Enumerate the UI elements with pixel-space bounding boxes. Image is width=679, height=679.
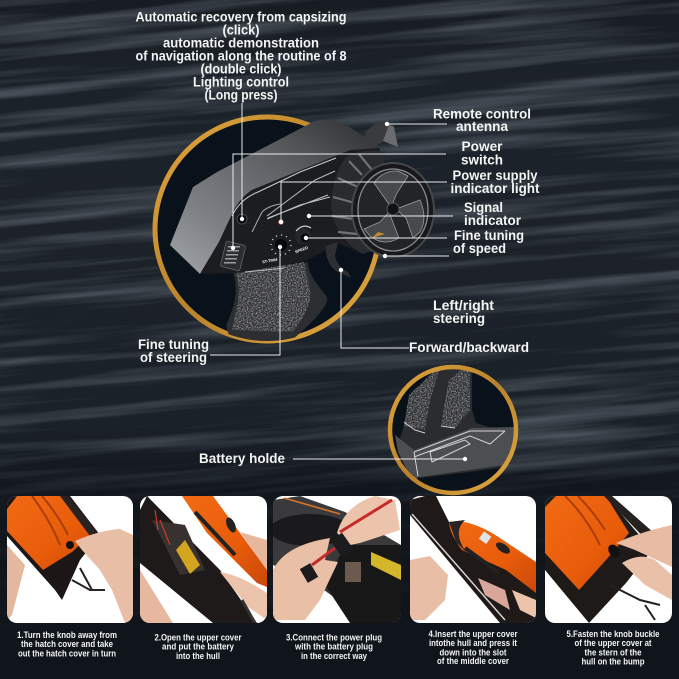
- caption: step 4: down into the slot: [440, 648, 507, 658]
- label: fine tuning of steering: of steering: [140, 350, 207, 365]
- label: fine tuning of speed: of speed: [453, 241, 506, 256]
- label: fine tuning of steering: Fine tuning: [138, 337, 209, 352]
- controller trigger: [326, 242, 351, 278]
- label: power switch: switch: [461, 152, 503, 168]
- controller front panel: SPEED: [294, 245, 309, 254]
- label: signal indicator: [464, 200, 522, 228]
- title block: automatic functions label: Lighting control: [193, 74, 289, 90]
- caption: step 5: the stern of the: [584, 648, 642, 658]
- caption: step 1: out the hatch cover in turn: [18, 648, 116, 660]
- label: remote control antenna: Remote control: [433, 106, 531, 122]
- title block: automatic functions label: (click): [222, 22, 260, 38]
- label: left/right steering: steering: [433, 311, 485, 326]
- title block: automatic functions label: [136, 10, 347, 102]
- label: battery holder: Battery holde: [199, 451, 285, 466]
- label: signal indicator: Signal: [464, 200, 503, 215]
- callout leader lines and dots: [210, 103, 467, 461]
- caption: step 2: into the hull: [176, 651, 220, 662]
- title block: automatic functions label: of navigation along the routine of 8: [136, 48, 347, 64]
- label: power supply indicator light: [450, 168, 540, 196]
- caption: step 2: [154, 632, 242, 662]
- caption: step 3: with the battery plug: [294, 642, 373, 652]
- caption: step 1: [17, 630, 117, 660]
- controller housing: [170, 120, 378, 274]
- controller wheel: [352, 163, 434, 257]
- controller antenna: [365, 122, 398, 147]
- grip close-up: [400, 369, 502, 478]
- caption: step 3: [286, 632, 382, 662]
- label: left/right steering: Left/right: [433, 298, 495, 313]
- label: fine tuning of speed: Fine tuning: [454, 228, 524, 243]
- caption: step 3: 3.Connect the power plug: [286, 632, 382, 644]
- main gold ring with controller: [155, 117, 434, 345]
- caption: step 2: and put the battery: [162, 642, 235, 652]
- label: forward/backward: Forward/backward: [409, 340, 529, 355]
- caption: step 3: in the correct way: [301, 651, 368, 662]
- label: remote control antenna: antenna: [456, 119, 508, 134]
- title block: automatic functions label: (Long press): [204, 88, 278, 102]
- label: power switch: Power: [462, 139, 503, 154]
- panel: step 5 photo: [545, 496, 672, 623]
- caption: step 1: the hatch cover and take: [21, 639, 113, 650]
- caption: step 4: intothe hull and press it: [429, 638, 518, 649]
- controller front panel: [200, 148, 380, 274]
- controller grip: [226, 262, 327, 345]
- caption: step 5: [566, 629, 660, 668]
- caption: step 2: 2.Open the upper cover: [154, 632, 242, 644]
- panel: step 4 photo: [410, 496, 536, 623]
- title block: automatic functions label: automatic demonstration: [163, 36, 319, 50]
- caption: step 5: hull on the bump: [582, 656, 645, 668]
- panel: step 3 photo: [270, 496, 401, 623]
- caption: step 1: 1.Turn the knob away from: [17, 630, 117, 641]
- battery base close-up: [395, 427, 514, 478]
- label: left/right steering: [433, 298, 495, 326]
- label: signal indicator: indicator: [464, 213, 522, 228]
- label: power supply indicator light: Power supply: [452, 168, 538, 183]
- title block: automatic functions label: Automatic recovery from capsizing: [136, 10, 346, 24]
- caption: step 4: [428, 629, 518, 667]
- panel: step 2 photo: [140, 496, 267, 623]
- label: power supply indicator light: indicator light: [450, 181, 540, 196]
- caption: step 4: 4.Insert the upper cover: [428, 629, 518, 640]
- label: remote control antenna: [433, 106, 531, 134]
- small gold ring: battery holder close-up: [390, 362, 520, 500]
- controller front panel: ST-TRIM: [262, 258, 278, 264]
- title block: automatic functions label: (double click): [200, 62, 282, 76]
- caption: step 4: of the middle cover: [437, 656, 509, 667]
- panel: step 1 photo: [7, 496, 133, 623]
- controller knurled drum: [331, 151, 385, 254]
- label: power switch: [461, 139, 503, 168]
- label: fine tuning of steering: [138, 337, 209, 365]
- label: fine tuning of speed: [453, 228, 524, 256]
- caption: step 5: 5.Fasten the knob buckle: [566, 629, 660, 640]
- caption: step 5: of the upper cover at: [574, 638, 652, 649]
